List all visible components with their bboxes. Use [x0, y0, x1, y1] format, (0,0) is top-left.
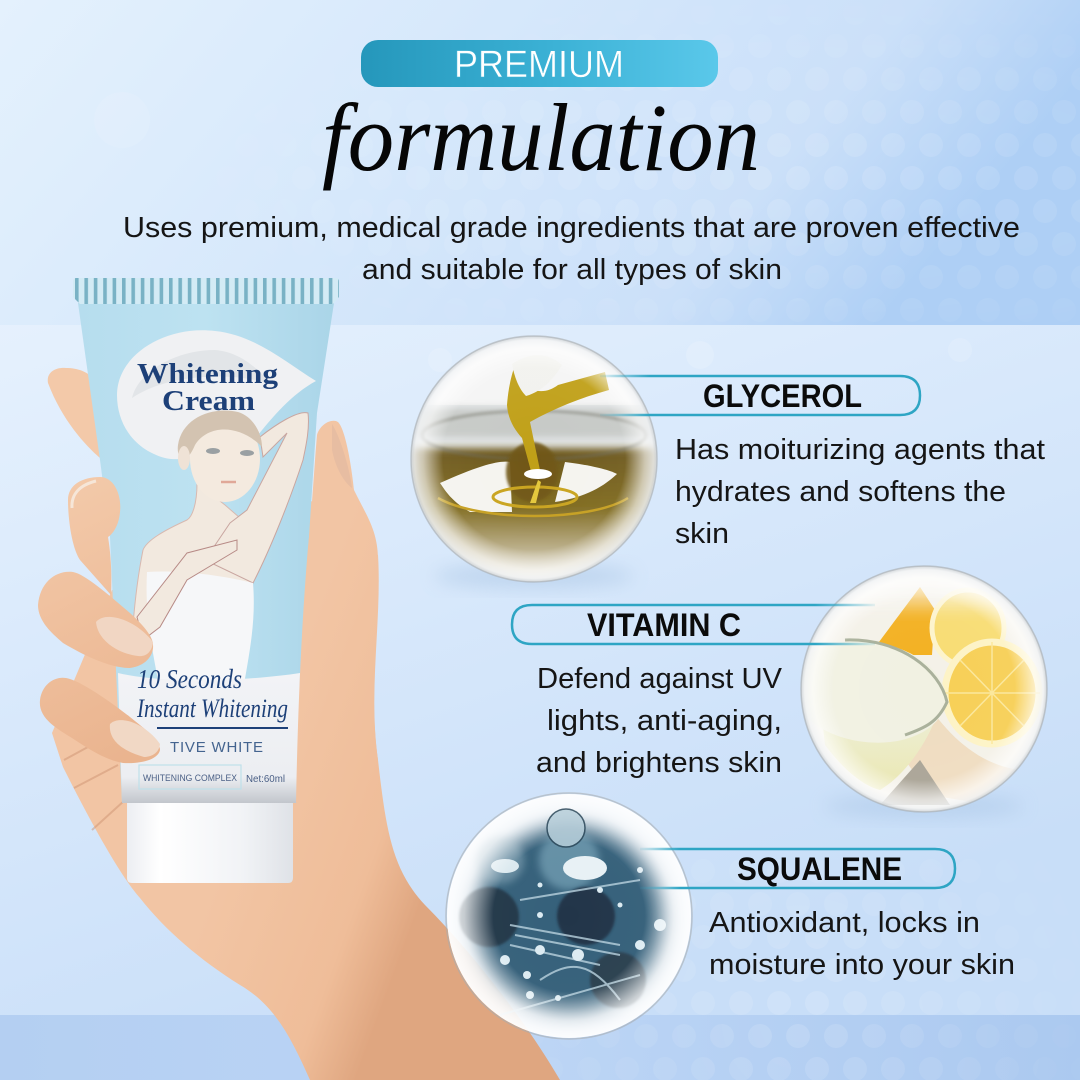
- vitamin c description: [536, 663, 783, 779]
- glycerol description: hydrates and softens the: [675, 476, 1006, 508]
- tube body: [78, 303, 334, 803]
- script tagline: [136, 664, 288, 723]
- sphere: glycerol oil: [410, 335, 660, 588]
- thumb: [296, 421, 378, 803]
- script tagline: Instant Whitening: [136, 694, 288, 723]
- fourth finger: [40, 678, 160, 763]
- second finger: [68, 477, 120, 595]
- vitamin c description: and brightens skin: [536, 747, 782, 779]
- complex and volume labels: WHITENING COMPLEX: [143, 773, 237, 783]
- label: vitamin c: VITAMIN C: [587, 607, 741, 643]
- brand headline: Cream: [162, 385, 255, 417]
- glycerol description: Has moiturizing agents that: [675, 434, 1045, 466]
- label: glycerol: [600, 376, 920, 415]
- white lower band: [118, 673, 300, 803]
- title: formulation: [322, 84, 760, 191]
- brand headline: [137, 358, 279, 417]
- tube cap: [127, 803, 293, 883]
- squalene description: [709, 907, 1015, 981]
- sphere: squalene droplets: [446, 793, 692, 1039]
- product tube: [73, 278, 339, 883]
- pill badge: premium: PREMIUM: [454, 44, 624, 86]
- squalene description: moisture into your skin: [709, 949, 1015, 981]
- vitamin c description: Defend against UV: [537, 663, 783, 695]
- label: squalene: [640, 849, 955, 888]
- complex and volume labels: Net:60ml: [246, 773, 285, 785]
- product line name: TIVE WHITE: [170, 739, 263, 756]
- label: glycerol: GLYCEROL: [703, 378, 862, 414]
- intro text: [123, 212, 1020, 286]
- label: squalene: SQUALENE: [737, 851, 902, 887]
- glycerol description: skin: [675, 518, 729, 550]
- complex and volume labels: [139, 765, 285, 789]
- squalene description: Antioxidant, locks in: [709, 907, 980, 939]
- pill badge: premium: [361, 40, 718, 87]
- hand behind tube: [48, 368, 560, 1080]
- fingers in front of tube: [38, 421, 378, 803]
- intro text: and suitable for all types of skin: [362, 254, 782, 286]
- crimped tube end: [73, 278, 339, 304]
- vitamin c description: lights, anti-aging,: [547, 705, 782, 737]
- label: vitamin c: [512, 605, 875, 644]
- palm and wrist: [52, 500, 560, 1080]
- glycerol description: [675, 434, 1045, 550]
- intro text: Uses premium, medical grade ingredients that are proven effective: [123, 212, 1020, 244]
- script tagline: 10 Seconds: [137, 664, 242, 694]
- third finger: [38, 572, 153, 668]
- illustration of woman: [117, 330, 316, 690]
- brand headline: Whitening: [137, 358, 279, 390]
- sphere: vitamin c citrus: [784, 565, 1050, 818]
- index finger: [48, 368, 112, 470]
